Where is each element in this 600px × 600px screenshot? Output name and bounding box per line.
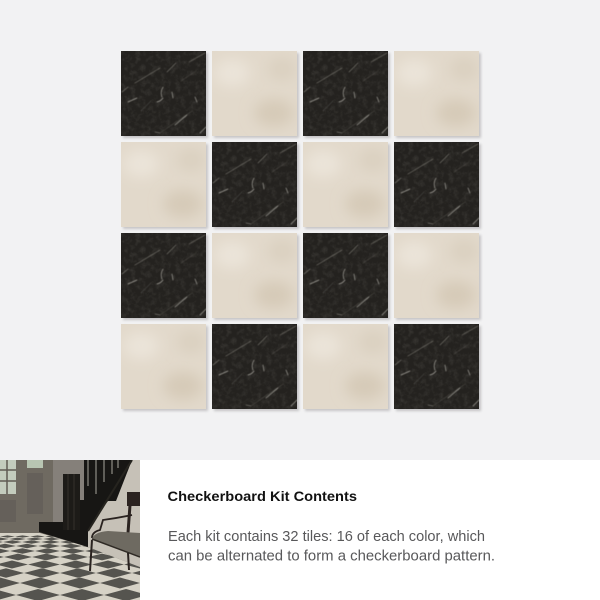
text block: can be alternated to form a checkerboard pattern.: [168, 548, 495, 564]
door and windows: [0, 460, 43, 522]
tile: cream row 1 col 2: [212, 51, 299, 138]
tile: dark row 3 col 1: [121, 233, 208, 320]
photo: hallway with checkerboard floor: [0, 460, 140, 600]
chair: [90, 492, 140, 571]
tile: dark row 2 col 2: [212, 142, 299, 229]
tile grid: [121, 51, 481, 411]
panel: kit contents: [140, 460, 600, 600]
tile: cream row 2 col 1: [121, 142, 208, 229]
tile: dark row 1 col 3: [303, 51, 390, 138]
tile: cream row 4 col 3: [303, 324, 390, 411]
staircase: [39, 460, 132, 547]
text block: [168, 529, 495, 564]
floor: [0, 533, 140, 600]
tile: cream row 3 col 4: [394, 233, 481, 320]
tile: dark row 2 col 4: [394, 142, 481, 229]
text block: Each kit contains 32 tiles: 16 of each color, which: [168, 529, 485, 545]
tile: dark row 3 col 3: [303, 233, 390, 320]
heading: Checkerboard Kit Contents: [168, 488, 357, 504]
tile: dark row 4 col 4: [394, 324, 481, 411]
tile: cream row 3 col 2: [212, 233, 299, 320]
tile: dark row 1 col 1: [121, 51, 208, 138]
tile: cream row 2 col 3: [303, 142, 390, 229]
tile: cream row 4 col 1: [121, 324, 208, 411]
tile: dark row 4 col 2: [212, 324, 299, 411]
wall under staircase: [88, 460, 140, 567]
tile: cream row 1 col 4: [394, 51, 481, 138]
